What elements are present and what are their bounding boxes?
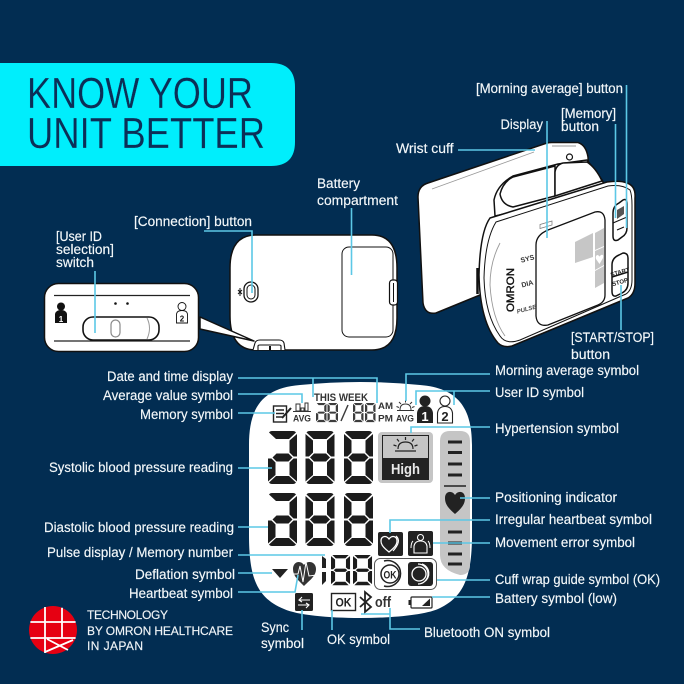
label: Bluetooth ON symbol: Bluetooth ON symbol xyxy=(424,625,550,640)
label: Display: Display xyxy=(500,117,543,132)
label: Morning average button: [Morning average] button xyxy=(476,81,623,96)
label: User ID selection switch: switch xyxy=(56,255,94,270)
label: Systolic blood pressure reading: Systolic blood pressure reading xyxy=(49,460,233,475)
systolic digits xyxy=(268,431,373,484)
label: START/STOP button xyxy=(571,285,654,362)
bluetooth off text: off xyxy=(375,594,392,611)
label: Date and time display xyxy=(107,369,377,403)
label: Irregular heartbeat symbol xyxy=(390,512,652,533)
monitor labels: OMRON xyxy=(505,268,517,312)
label: Average value symbol: Average value symbol xyxy=(103,388,233,403)
pulse digits xyxy=(322,555,372,585)
date and time digits: THIS WEEK xyxy=(314,392,368,404)
logo: technology by Omron Healthcare in Japan xyxy=(29,606,233,654)
label: Sync symbol: symbol xyxy=(261,636,304,651)
OK symbol xyxy=(332,594,356,610)
label: Morning average symbol xyxy=(406,363,639,401)
label: User ID selection switch: [User ID xyxy=(56,229,102,244)
illustration: wrist unit front view: START xyxy=(610,267,631,279)
logo text xyxy=(87,608,233,653)
label: START/STOP button: button xyxy=(571,347,610,362)
label: Positioning indicator: Positioning indicator xyxy=(495,490,618,505)
label: Battery compartment xyxy=(317,176,398,275)
label: Memory button xyxy=(561,106,616,218)
title banner xyxy=(0,63,295,166)
illustration: wrist unit front view: PULSE xyxy=(516,304,538,316)
battery symbol xyxy=(408,597,432,608)
logo text: BY OMRON HEALTHCARE xyxy=(87,624,233,638)
label: Memory button: button xyxy=(561,119,599,134)
label: Battery symbol (low): Battery symbol (low) xyxy=(495,591,617,606)
display panel xyxy=(249,382,472,618)
label: Heartbeat symbol: Heartbeat symbol xyxy=(129,586,233,601)
illustration: wrist unit front view: SYS xyxy=(520,254,536,265)
title banner: KNOW YOUR xyxy=(27,69,253,118)
hypertension symbol xyxy=(378,432,433,483)
label: Battery compartment: Battery xyxy=(317,176,360,191)
label: START/STOP button: [START/STOP] xyxy=(571,330,654,345)
user 2 icon: 2 xyxy=(441,409,449,424)
date and time digits xyxy=(314,392,393,425)
label: Pulse display / Memory number: Pulse display / Memory number xyxy=(47,545,233,560)
label: OK symbol xyxy=(327,610,390,647)
user 1 icon: 1 xyxy=(421,409,429,424)
diastolic digits xyxy=(268,493,373,546)
label: Deflation symbol: Deflation symbol xyxy=(135,567,235,582)
label: Sync symbol: Sync xyxy=(261,620,289,635)
OK symbol: OK xyxy=(336,596,352,610)
user 2 icon xyxy=(438,396,452,424)
illustration: user ID switch callout: 2 xyxy=(180,314,185,324)
label: Sync symbol xyxy=(261,610,304,651)
label: Bluetooth ON symbol xyxy=(361,608,550,640)
positioning indicator xyxy=(440,431,470,575)
label: Diastolic blood pressure reading: Diastolic blood pressure reading xyxy=(44,520,234,535)
label: Wrist cuff: Wrist cuff xyxy=(396,141,454,156)
user 1 icon xyxy=(417,396,433,424)
label: Cuff wrap guide symbol (OK): Cuff wrap guide symbol (OK) xyxy=(495,572,660,587)
label: Morning average symbol: Morning average symbol xyxy=(495,363,639,378)
label: Date and time display: Date and time display xyxy=(107,369,233,384)
illustration: user ID switch callout xyxy=(44,284,254,352)
wrist cuff xyxy=(418,142,590,313)
title banner: UNIT BETTER xyxy=(27,109,265,158)
average value icon: AVG xyxy=(293,414,311,425)
illustration: wrist unit front view xyxy=(418,142,635,347)
morning average icon: AVG xyxy=(396,414,414,425)
irregular heartbeat symbol xyxy=(378,532,403,556)
morning average icon xyxy=(396,400,414,425)
illustration: unit back view xyxy=(230,235,398,350)
movement error symbol xyxy=(408,531,433,556)
label: Irregular heartbeat symbol: Irregular heartbeat symbol xyxy=(495,512,652,527)
cuff wrap guide symbol xyxy=(374,558,436,590)
heartbeat symbol xyxy=(291,562,317,586)
label: Hypertension symbol: Hypertension symbol xyxy=(495,421,619,436)
bluetooth symbol xyxy=(360,592,371,612)
label: Wrist cuff xyxy=(396,141,535,156)
label: Display xyxy=(500,117,547,238)
illustration: LCD display xyxy=(249,382,472,618)
label: Memory button: [Memory] xyxy=(561,106,616,121)
sync symbol xyxy=(295,593,313,611)
label: Connection button: [Connection] button xyxy=(134,214,252,229)
average value icon xyxy=(293,403,311,425)
label: Hypertension symbol xyxy=(411,421,619,436)
label: User ID selection switch xyxy=(56,229,114,333)
label: User ID symbol: User ID symbol xyxy=(495,385,584,400)
label: User ID selection switch: selection] xyxy=(56,242,114,257)
label: Average value symbol xyxy=(103,388,302,403)
label: Battery compartment: compartment xyxy=(317,193,398,208)
cuff join xyxy=(476,268,479,294)
illustration: wrist unit front view: DIA xyxy=(521,280,534,289)
monitor buttons xyxy=(613,200,627,240)
monitor body xyxy=(479,181,635,347)
memory icon xyxy=(274,406,291,422)
illustration: wrist unit front view: STOP xyxy=(612,278,629,288)
date and time digits: PM xyxy=(378,414,393,425)
icon: red circle with white lattice xyxy=(29,606,77,654)
monitor display xyxy=(536,212,605,325)
logo text: IN JAPAN xyxy=(87,639,143,653)
date and time digits: AM xyxy=(378,401,393,412)
label: User ID symbol xyxy=(416,385,584,405)
label: OK symbol: OK symbol xyxy=(327,632,390,647)
label: Movement error symbol: Movement error symbol xyxy=(495,535,635,550)
label: Memory symbol: Memory symbol xyxy=(140,407,233,422)
illustration: user ID switch callout: 1 xyxy=(59,315,64,324)
label: Heartbeat symbol xyxy=(129,575,298,601)
label: Connection button xyxy=(134,214,252,293)
hypertension symbol: High xyxy=(391,461,420,478)
logo text: TECHNOLOGY xyxy=(87,608,168,622)
cuff wrap guide symbol: OK xyxy=(384,570,397,582)
deflation symbol xyxy=(272,569,288,578)
